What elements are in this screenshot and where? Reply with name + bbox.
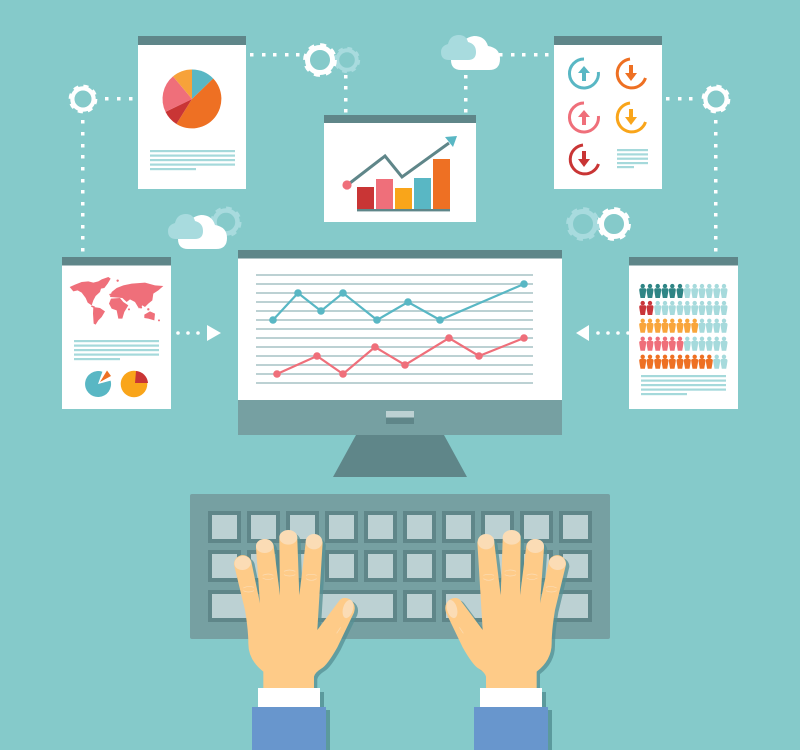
panel: bar chart document — [324, 115, 476, 222]
gear: light, behind lower cloud — [212, 208, 240, 236]
text lines — [74, 340, 159, 360]
gear: white, top centre — [305, 45, 335, 75]
pictogram rows — [639, 284, 728, 369]
text lines — [617, 149, 648, 168]
icon: teal up arrow — [569, 59, 598, 88]
dotted connectors — [81, 53, 718, 252]
monitor stand — [333, 435, 467, 477]
gear: light, top centre — [335, 48, 359, 72]
cloud: lower — [168, 214, 227, 249]
icon: yellow down arrow — [617, 103, 646, 132]
icon: orange down arrow — [617, 59, 646, 88]
icon: red down arrow — [570, 145, 598, 174]
gear: white, far left — [70, 86, 96, 112]
right hand — [445, 530, 569, 750]
keyboard — [190, 494, 610, 639]
panel: arrows document — [554, 36, 662, 189]
left hand — [233, 530, 358, 750]
red line series — [273, 334, 528, 378]
trend arrow — [342, 136, 457, 190]
text lines — [150, 150, 235, 170]
chart grid — [256, 274, 533, 384]
gear: light, lower right — [568, 209, 598, 239]
world map — [70, 277, 163, 325]
bar chart — [357, 159, 450, 211]
pie chart — [163, 69, 221, 128]
gear: white, far right — [703, 86, 729, 112]
panel: pie chart document — [138, 36, 246, 189]
monitor button — [386, 411, 414, 424]
keys — [210, 513, 590, 620]
panel: people document — [629, 257, 738, 409]
teal pie — [85, 370, 111, 397]
gear: white, lower right — [599, 209, 629, 239]
arrow: right document to monitor — [576, 325, 630, 341]
cloud: top — [441, 35, 500, 70]
panel: world map document — [62, 257, 171, 409]
yellow pie — [121, 371, 148, 397]
teal line series — [269, 280, 528, 324]
text lines — [641, 375, 726, 395]
monitor — [238, 250, 562, 435]
icon: pink up arrow — [569, 103, 598, 132]
arrow: left document to monitor — [176, 325, 221, 341]
